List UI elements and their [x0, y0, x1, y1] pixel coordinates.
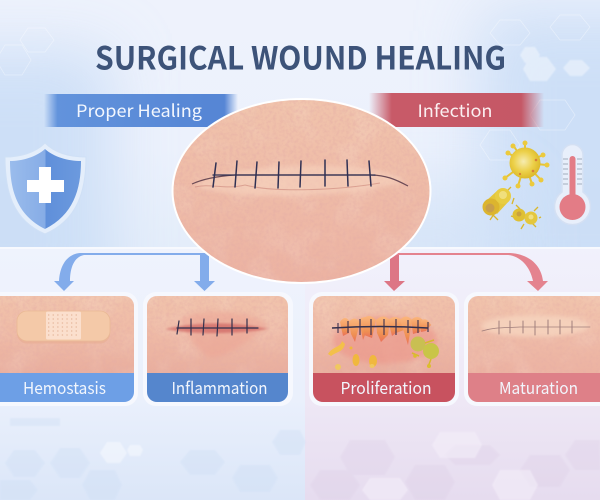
card: hemostasis [0, 292, 138, 406]
arrow: to inflammation [194, 253, 215, 291]
banner: infection [369, 93, 544, 127]
faded stitches [482, 320, 590, 335]
label: proliferation: Proliferation [340, 375, 432, 399]
arrow: to maturation [395, 253, 548, 291]
icon: virus [502, 140, 550, 188]
photo: central sutured wound [170, 95, 435, 287]
banner: infection: Infection [418, 97, 492, 122]
banner: proper healing [44, 94, 238, 127]
stitches [177, 319, 258, 336]
label: maturation: Maturation [499, 375, 578, 399]
banner: proper healing: Proper Healing [76, 97, 202, 122]
card: inflammation [143, 292, 293, 406]
card: maturation [464, 292, 600, 406]
arrow: to hemostasis [54, 253, 205, 291]
pus and swollen wound [328, 316, 439, 370]
icon: shield [5, 143, 86, 234]
title: SURGICAL WOUND HEALING [95, 34, 506, 80]
icon: thermometer [555, 144, 591, 225]
panel: lower strip [0, 247, 600, 249]
card: proliferation [309, 292, 459, 406]
label: inflammation: Inflammation [172, 375, 268, 399]
label: hemostasis: Hemostasis [23, 375, 106, 399]
arrow: to proliferation [384, 253, 405, 291]
icon: bandage [17, 311, 110, 344]
icon: bacteria [482, 187, 541, 229]
